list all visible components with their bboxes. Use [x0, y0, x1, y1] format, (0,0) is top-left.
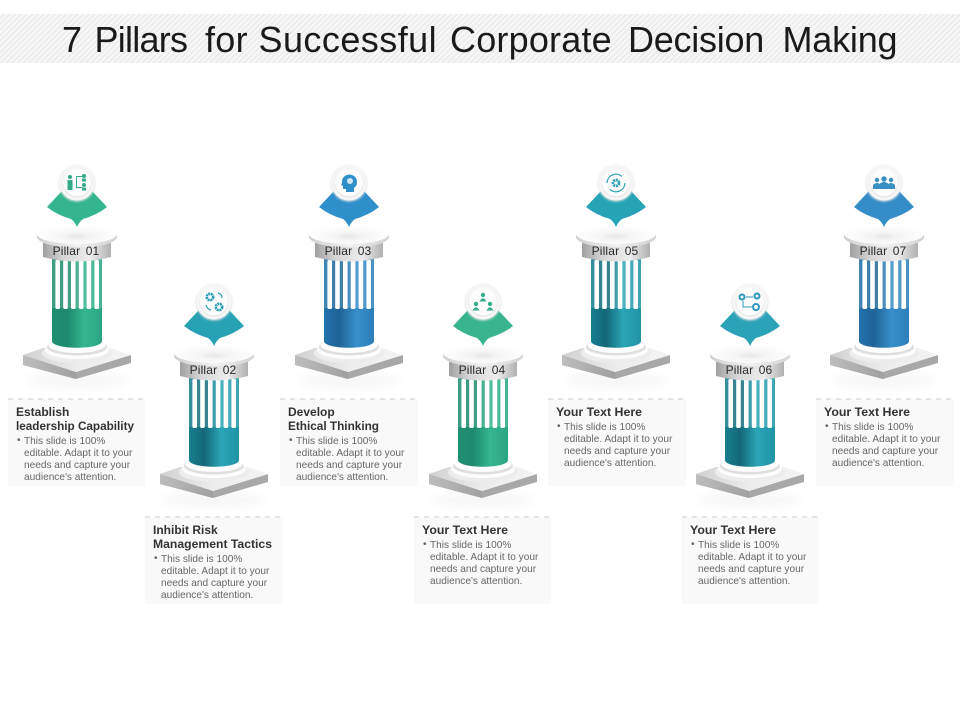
- pillar 07: Pillar 07: [860, 244, 907, 258]
- panel: pillar 07 text: Your Text Here: [824, 405, 910, 419]
- pillar 05: [562, 166, 670, 388]
- pillar 02: Pillar 02: [190, 363, 237, 377]
- panel: establish leadership capability: This slide is 100%: [24, 436, 105, 447]
- panel: pillar 07 text: needs and capture your: [832, 446, 939, 457]
- panel: inhibit risk management tactics: editable. Adapt it to your: [161, 566, 270, 577]
- panel: pillar 07 text: •: [825, 421, 829, 432]
- panel: pillar 06 text: [682, 517, 819, 604]
- panel: develop ethical thinking: Develop: [288, 405, 335, 419]
- icon: three people: [873, 176, 895, 189]
- panel: pillar 06 text: Your Text Here: [690, 523, 776, 537]
- title: Pillars: [94, 19, 187, 60]
- panel: establish leadership capability: editable. Adapt it to your: [24, 448, 133, 459]
- panel: develop ethical thinking: Ethical Thinking: [288, 419, 379, 433]
- icon: presenter and team: [68, 174, 86, 190]
- panel: establish leadership capability: audience's attention.: [24, 472, 116, 483]
- panel: establish leadership capability: Establish: [16, 405, 69, 419]
- pillar 03: [295, 166, 403, 388]
- panel: pillar 04 text: editable. Adapt it to your: [430, 552, 539, 563]
- title: for: [205, 19, 248, 60]
- pillar 01: Pillar 01: [53, 244, 100, 258]
- panel: pillar 04 text: needs and capture your: [430, 564, 537, 575]
- panel: inhibit risk management tactics: [145, 517, 283, 604]
- panel: pillar 07 text: audience's attention.: [832, 458, 924, 469]
- panel: inhibit risk management tactics: •: [154, 553, 158, 564]
- icon: head with gear: [341, 175, 357, 192]
- panel: pillar 06 text: •: [691, 539, 695, 550]
- panel: establish leadership capability: •: [17, 435, 21, 446]
- panel: develop ethical thinking: [280, 399, 418, 486]
- panel: develop ethical thinking: editable. Adapt it to your: [296, 448, 405, 459]
- panel: pillar 05 text: audience's attention.: [564, 458, 656, 469]
- panel: inhibit risk management tactics: Management Tactics: [153, 537, 272, 551]
- panel: pillar 06 text: editable. Adapt it to your: [698, 552, 807, 563]
- panel: pillar 05 text: This slide is 100%: [564, 422, 645, 433]
- panel: pillar 04 text: This slide is 100%: [430, 540, 511, 551]
- icon: gear in cycle: [607, 174, 625, 192]
- icon: group hierarchy: [472, 293, 494, 310]
- panel: pillar 05 text: •: [557, 421, 561, 432]
- panel: pillar 06 text: audience's attention.: [698, 576, 790, 587]
- title: Corporate: [450, 19, 612, 60]
- panel: develop ethical thinking: needs and capture your: [296, 460, 403, 471]
- panel: pillar 06 text: needs and capture your: [698, 564, 805, 575]
- pillar 06: [696, 284, 804, 507]
- panel: pillar 07 text: This slide is 100%: [832, 422, 913, 433]
- icon: connected gears: [740, 294, 760, 310]
- panel: inhibit risk management tactics: This slide is 100%: [161, 554, 242, 565]
- pillar 04: Pillar 04: [459, 363, 506, 377]
- pillar 02: [160, 284, 268, 507]
- panel: pillar 07 text: [816, 399, 954, 486]
- pillar 06: Pillar 06: [726, 363, 773, 377]
- panel: pillar 04 text: •: [423, 539, 427, 550]
- panel: establish leadership capability: needs and capture your: [24, 460, 131, 471]
- panel: inhibit risk management tactics: needs and capture your: [161, 578, 268, 589]
- panel: pillar 05 text: Your Text Here: [556, 405, 642, 419]
- panel: inhibit risk management tactics: Inhibit Risk: [153, 523, 218, 537]
- panel: pillar 07 text: editable. Adapt it to your: [832, 434, 941, 445]
- panel: pillar 06 text: This slide is 100%: [698, 540, 779, 551]
- panel: develop ethical thinking: This slide is 100%: [296, 436, 377, 447]
- panel: pillar 05 text: [548, 399, 686, 486]
- title: Making: [782, 19, 897, 60]
- pillar 03: Pillar 03: [325, 244, 372, 258]
- pillar 07: [830, 166, 938, 388]
- pillar 01: [23, 166, 131, 388]
- panel: pillar 05 text: needs and capture your: [564, 446, 671, 457]
- panel: establish leadership capability: [8, 399, 145, 486]
- pillar 04: [429, 284, 537, 507]
- panel: pillar 04 text: Your Text Here: [422, 523, 508, 537]
- panel: pillar 04 text: audience's attention.: [430, 576, 522, 587]
- title band: [0, 14, 960, 63]
- panel: inhibit risk management tactics: audience's attention.: [161, 590, 253, 601]
- title: Decision: [628, 19, 764, 60]
- panel: develop ethical thinking: audience's attention.: [296, 472, 388, 483]
- panel: pillar 04 text: [414, 517, 551, 604]
- panel: establish leadership capability: leadership Capability: [16, 419, 134, 433]
- panel: pillar 05 text: editable. Adapt it to your: [564, 434, 673, 445]
- title: 7: [62, 19, 82, 60]
- title: Successful: [258, 19, 437, 60]
- pillar 05: Pillar 05: [592, 244, 639, 258]
- panel: develop ethical thinking: •: [289, 435, 293, 446]
- icon: gears: [206, 293, 222, 310]
